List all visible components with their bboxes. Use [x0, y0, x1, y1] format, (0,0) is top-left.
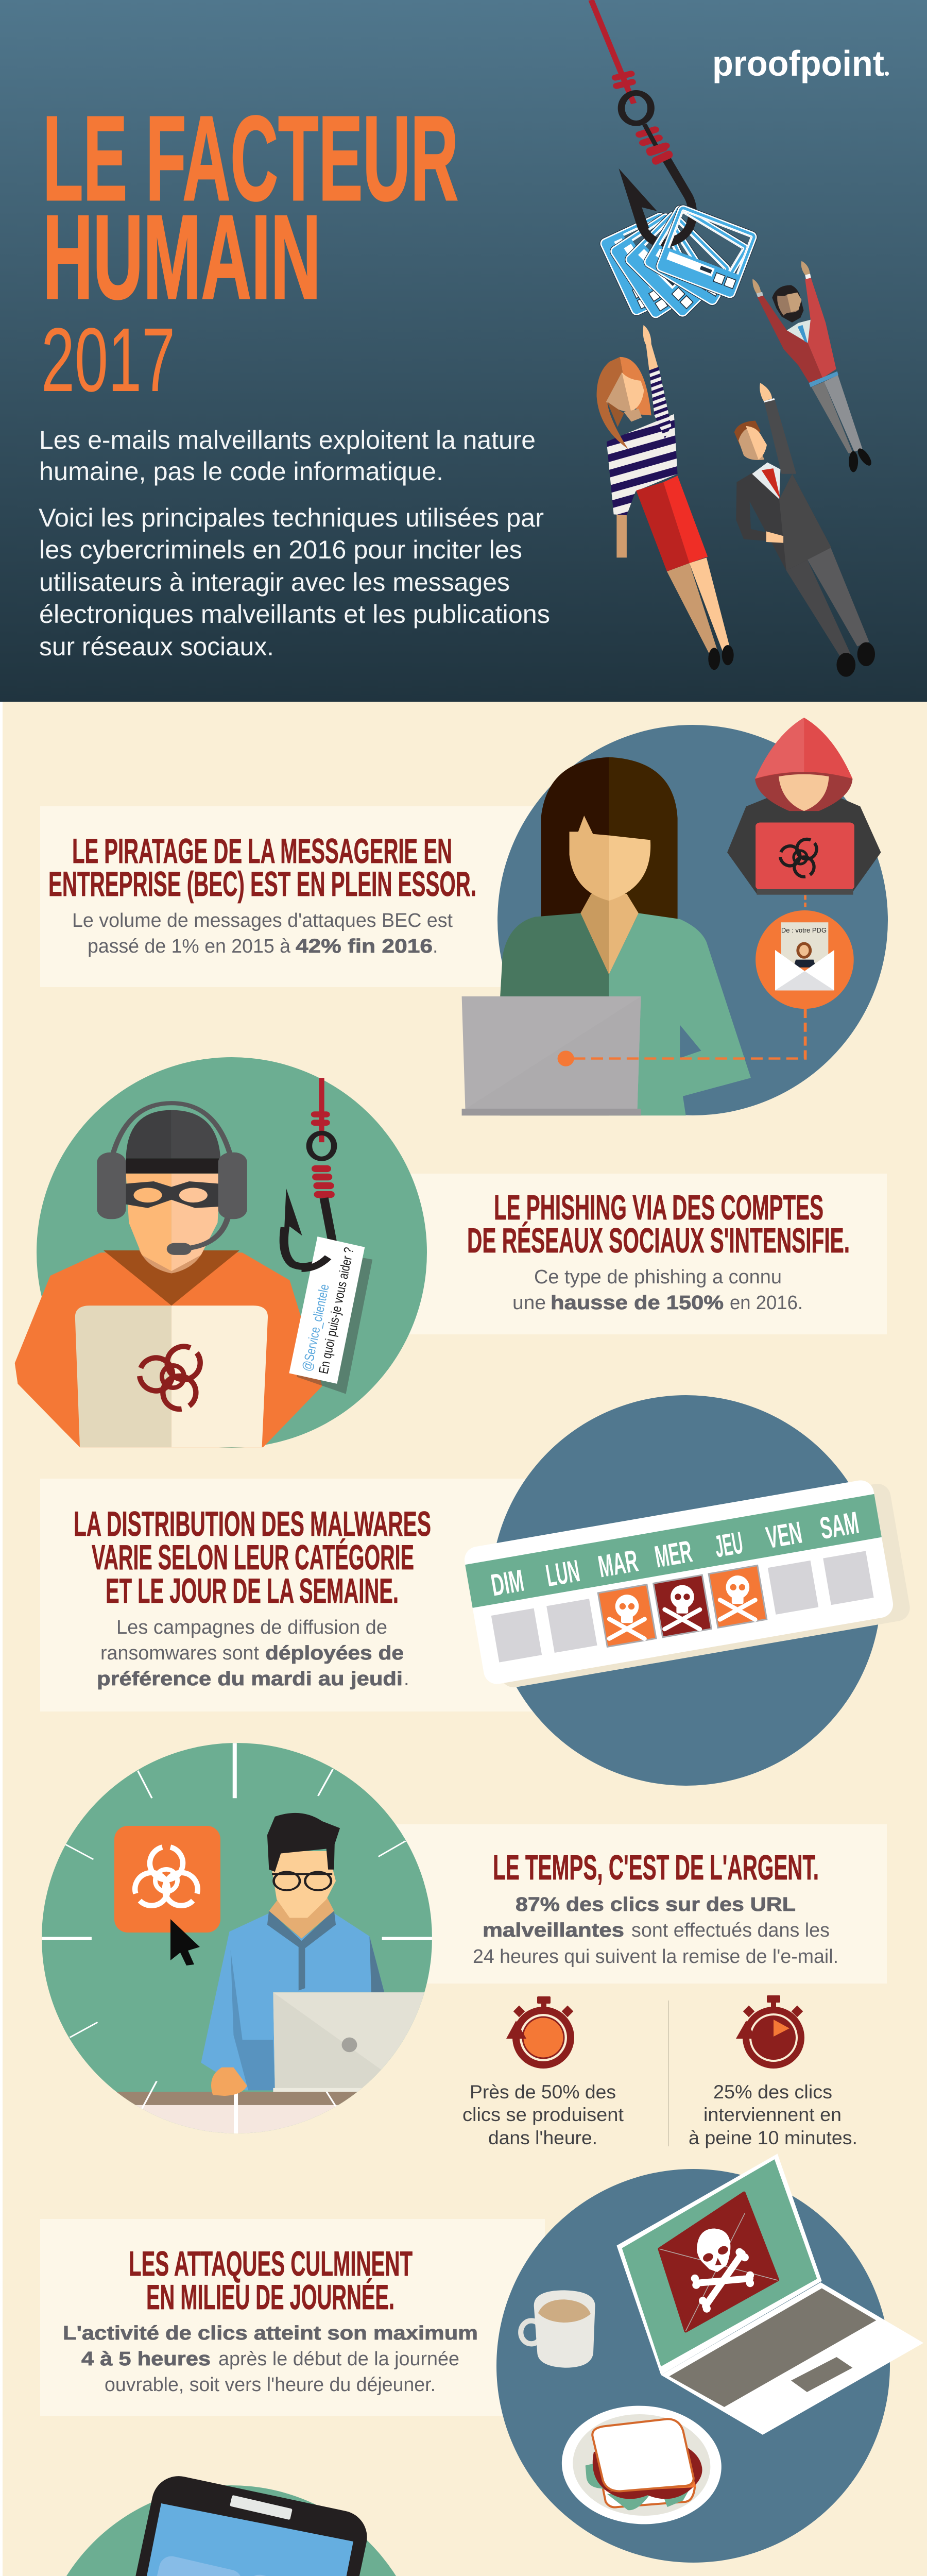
title: LE FACTEUR HUMAIN 2017: LE FACTEUR	[43, 91, 458, 226]
panel: midday text: LES ATTAQUES CULMINENT	[129, 2244, 413, 2283]
illustration: green clock circle	[42, 1743, 432, 2133]
weekday labels	[489, 1505, 861, 1603]
icon: email from CEO	[756, 910, 854, 1009]
panel: phishing text: Ce type de phishing a connu	[534, 1266, 782, 1288]
panel: midday text: ouvrable, soit vers l'heure du déjeuner.	[105, 2374, 436, 2396]
panel: BEC text: ENTREPRISE (BEC) EST EN PLEIN ESSOR.	[48, 865, 476, 904]
panel: malware text: préférence du mardi au jeudi	[97, 1668, 403, 1690]
panel: BEC text	[40, 806, 545, 987]
panel: BEC text: LE PIRATAGE DE LA MESSAGERIE EN	[72, 832, 452, 871]
icon: biohazard on laptop	[126, 1326, 226, 1425]
timer: 50 percent	[506, 1996, 574, 2069]
section 4: time is money	[36, 1743, 887, 2148]
panel: phishing text	[402, 1174, 887, 1334]
panel: malware text: .	[404, 1668, 409, 1690]
illustration: man in red sweater reaching	[752, 261, 874, 472]
panel: BEC text: Le volume de messages d'attaques BEC est	[72, 910, 453, 931]
panel: malware text: LA DISTRIBUTION DES MALWARES	[74, 1504, 431, 1544]
illustration: blue circle	[491, 1395, 881, 1786]
title: LE FACTEUR HUMAIN 2017: HUMAIN	[43, 191, 321, 324]
weekday labels: SAM	[817, 1505, 861, 1546]
intro text: Les e-mails malveillants exploitent la nature	[39, 426, 536, 454]
panel: time text	[391, 1824, 887, 1984]
panel: midday text: EN MILIEU DE JOURNÉE.	[146, 2278, 394, 2317]
panel: BEC text: .	[433, 936, 438, 957]
panel: time text: 24 heures qui suivent la remise de l'e-mail.	[473, 1946, 838, 1968]
panel: phishing text: hausse de 150%	[551, 1292, 724, 1314]
illustration: coffee mug	[521, 2290, 595, 2368]
section 2: phishing	[15, 1057, 887, 1448]
text: 25 percent in ten minutes: interviennent en	[703, 2104, 842, 2125]
weekday labels: MER	[652, 1534, 695, 1574]
icon: biohazard tile and cursor	[114, 1826, 220, 1965]
panel: phishing text: en 2016.	[730, 1292, 803, 1314]
panel: midday text: L'activité de clics atteint son maximum	[63, 2323, 478, 2344]
weekday labels: JEU	[712, 1525, 745, 1564]
icon: biohazard on hacker laptop	[772, 826, 832, 887]
illustration: woman at laptop	[462, 757, 805, 1115]
illustration: sandwich on plate	[559, 2402, 725, 2528]
calendar	[462, 1476, 912, 1692]
text: 25 percent in ten minutes: à peine 10 minutes.	[689, 2127, 857, 2148]
illustration: blue circle	[497, 725, 888, 1115]
intro text: Voici les principales techniques utilisées par	[39, 503, 544, 532]
panel: BEC text: passé de 1% en 2015 à	[88, 936, 291, 957]
text: 25 percent in ten minutes	[689, 2081, 857, 2148]
text: 50 percent in the hour: clics se produisent	[462, 2104, 624, 2125]
illustration: green circle	[36, 2485, 426, 2576]
weekday labels: DIM	[489, 1563, 526, 1603]
panel: time text: sont effectués dans les	[631, 1920, 830, 1941]
panel: time text: malveillantes	[483, 1920, 624, 1941]
panel: malware text: ransomwares sont	[100, 1642, 259, 1664]
text: 50 percent in the hour: dans l'heure.	[488, 2127, 597, 2148]
panel: phishing text: une	[512, 1292, 546, 1314]
illustration: phone with apps	[78, 2471, 372, 2576]
illustration: masked man with headset	[15, 1103, 322, 1447]
section 6: fake apps	[36, 2471, 887, 2576]
illustration: man at laptop on clock	[36, 1743, 449, 2137]
panel: malware text: VARIE SELON LEUR CATÉGORIE	[92, 1538, 414, 1577]
illustration: man in suit reaching	[734, 383, 875, 677]
weekday labels: VEN	[764, 1515, 804, 1555]
timer: 25 percent	[736, 1995, 804, 2069]
icon: hook with tag	[284, 1078, 372, 1394]
intro text: sur réseaux sociaux.	[39, 632, 274, 661]
section 1: BEC	[40, 718, 888, 1115]
icon: hook with tag: @Service_clientele	[299, 1283, 332, 1372]
text: 50 percent in the hour	[462, 2081, 624, 2148]
title: LE FACTEUR HUMAIN 2017	[41, 91, 458, 411]
panel: malware text: ET LE JOUR DE LA SEMAINE.	[106, 1571, 399, 1611]
intro text	[39, 426, 550, 661]
icon: email from CEO: De : votre PDG	[781, 926, 827, 934]
illustration: woman reaching	[597, 325, 734, 670]
illustration: green circle	[37, 1057, 427, 1448]
intro text: humaine, pas le code informatique.	[39, 457, 443, 486]
panel: midday text: 4 à 5 heures	[81, 2348, 211, 2370]
intro text: utilisateurs à interagir avec les messages	[39, 568, 510, 597]
illustration: hacker with red hood	[727, 718, 881, 910]
header panel	[0, 0, 927, 702]
weekday labels: LUN	[543, 1553, 582, 1593]
icon: fishing line and hook with URL cards	[591, 0, 755, 316]
intro text: électroniques malveillants et les publications	[39, 600, 550, 629]
logo: proofpoint: proofpoint	[712, 43, 884, 83]
panel: malware text: déployées de	[265, 1642, 404, 1664]
title: LE FACTEUR HUMAIN 2017: 2017	[41, 310, 175, 411]
section 5: midday attacks	[40, 2154, 923, 2563]
section 3: malware distribution	[40, 1395, 912, 1786]
panel: malware text: Les campagnes de diffusion de	[116, 1617, 387, 1638]
intro text: les cybercriminels en 2016 pour inciter les	[39, 535, 522, 564]
panel: midday text	[40, 2219, 545, 2416]
panel: time text: 87% des clics sur des URL	[516, 1894, 796, 1916]
illustration: laptop with skull email	[616, 2154, 923, 2435]
panel: BEC text: 42% fin 2016	[296, 936, 433, 957]
weekday labels: MAR	[596, 1543, 641, 1584]
panel: malware text	[40, 1479, 545, 1711]
day squares	[490, 1547, 874, 1666]
icon: hook with tag: En quoi puis-je vous aider ?	[315, 1246, 357, 1375]
illustration: blue circle	[496, 2169, 890, 2563]
text: 50 percent in the hour: Près de 50% des	[470, 2081, 616, 2103]
panel: midday text: après le début de la journée	[218, 2348, 459, 2370]
text: 25 percent in ten minutes: 25% des clics	[713, 2081, 832, 2103]
